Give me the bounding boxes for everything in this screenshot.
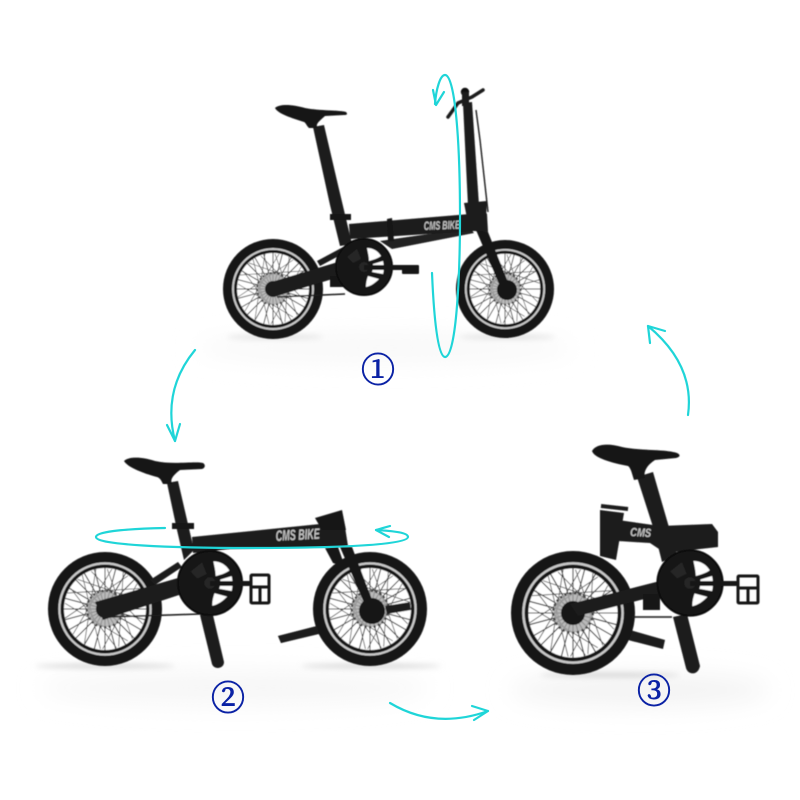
front wheel xyxy=(313,552,427,666)
chainring xyxy=(178,551,242,615)
folded handlebar xyxy=(315,510,346,530)
logo: CMS BIKE xyxy=(275,526,321,545)
front hub xyxy=(359,598,385,624)
seat post xyxy=(637,472,677,562)
folded stem xyxy=(600,510,624,560)
arrow: step 2 to 3 xyxy=(390,703,488,720)
pedal xyxy=(364,265,419,274)
lower tube xyxy=(380,228,474,249)
step number 3: ③ xyxy=(637,674,671,711)
chainring xyxy=(658,551,722,615)
seat post xyxy=(313,125,352,246)
rear wheel xyxy=(223,239,323,339)
saddle xyxy=(592,445,680,480)
bike 1: unfolded xyxy=(223,88,554,339)
pedal xyxy=(210,575,269,603)
step number 2: ② xyxy=(211,681,245,718)
kickstand xyxy=(200,611,224,668)
rotation arrow: frame xyxy=(96,526,408,548)
pedal xyxy=(690,576,758,603)
handlebar stem xyxy=(463,102,479,206)
front hub xyxy=(497,280,517,300)
folding latch xyxy=(387,218,394,241)
bike 2: frame folded xyxy=(48,458,427,668)
frame tube xyxy=(192,523,348,553)
wheel xyxy=(511,551,635,675)
chainstay xyxy=(95,578,182,620)
chainring xyxy=(336,239,392,295)
saddle xyxy=(124,458,205,484)
stand xyxy=(628,630,665,649)
arrow: step 3 to 1 xyxy=(648,326,689,415)
fork xyxy=(476,230,510,291)
logo: CMS xyxy=(630,525,652,540)
rotation arrow: stem xyxy=(432,75,460,357)
folded stem xyxy=(278,602,411,643)
rear wheel xyxy=(48,552,162,666)
bottom bracket xyxy=(330,276,346,287)
kickstand xyxy=(673,614,700,673)
logo: CMS BIKE xyxy=(424,218,461,233)
frame tube xyxy=(618,520,718,553)
chainstay xyxy=(268,262,342,297)
folded stem visible part xyxy=(278,626,319,643)
bottom bracket xyxy=(643,594,660,610)
arrow: step 1 to 2 xyxy=(167,350,195,441)
fork xyxy=(325,547,345,567)
bike 3: fully folded xyxy=(511,445,758,675)
seat clamp xyxy=(172,523,194,529)
ground shadows xyxy=(35,334,770,706)
seat post xyxy=(167,481,194,560)
front wheel xyxy=(456,240,554,338)
chainstay xyxy=(570,581,664,616)
seat clamp xyxy=(330,214,351,220)
step number 1: ① xyxy=(361,353,395,390)
frame tube xyxy=(349,205,488,239)
saddle xyxy=(275,105,347,128)
